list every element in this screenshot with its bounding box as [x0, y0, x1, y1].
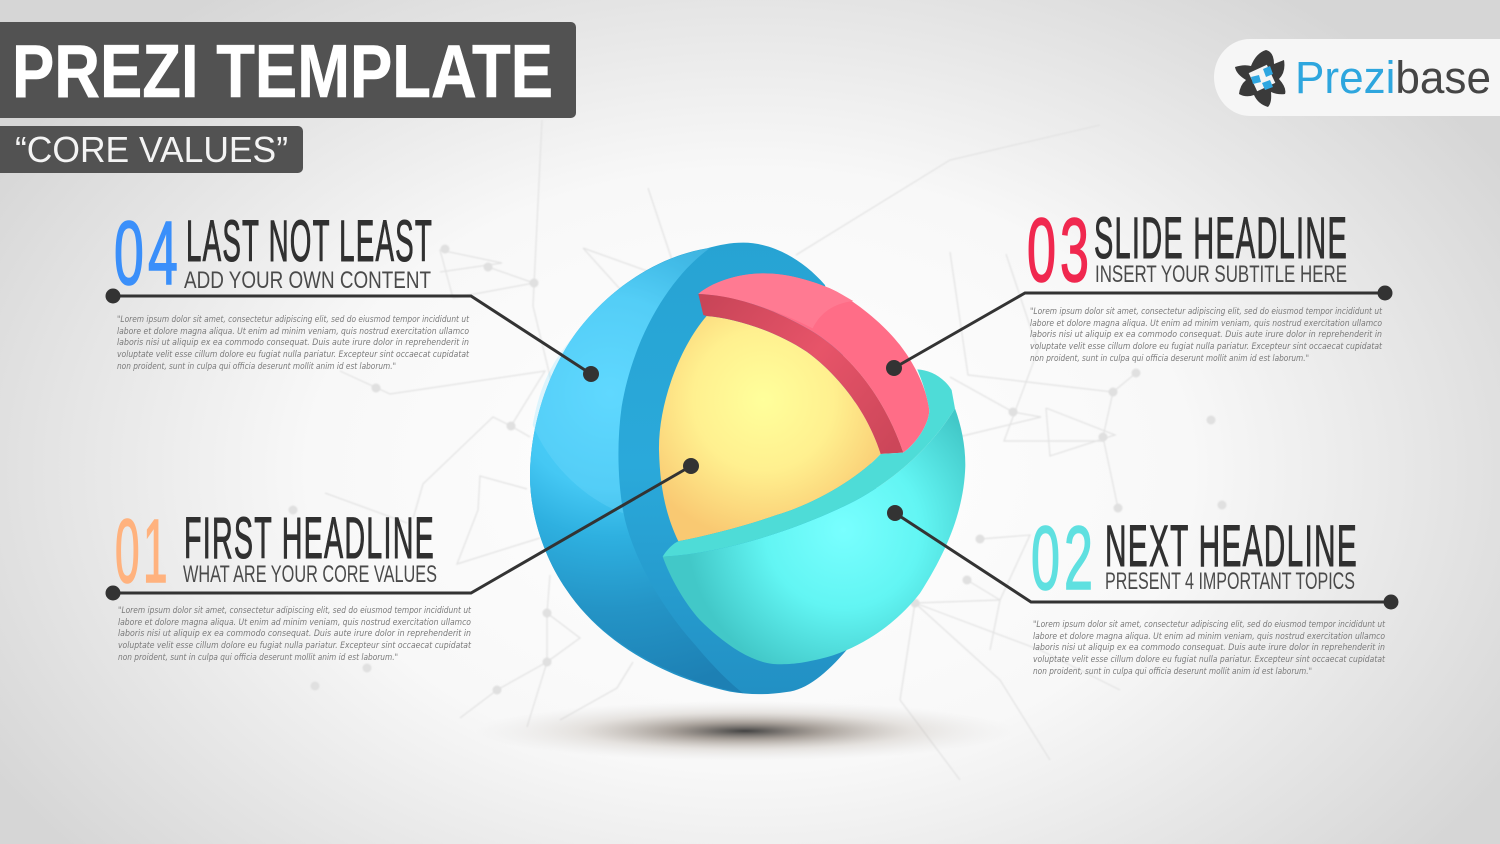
callout 01: First headline: 01	[115, 502, 171, 602]
leader line	[886, 286, 1392, 376]
number 04: 04	[114, 204, 182, 304]
body text	[118, 606, 472, 663]
body text: non proident, sunt in culpa qui officia deserunt mollit anim id est laborum."	[1030, 354, 1309, 364]
icon: Prezibase star	[1235, 50, 1285, 107]
subheading: ADD YOUR OWN CONTENT	[184, 267, 431, 294]
red outer face	[698, 273, 929, 453]
body text	[1033, 620, 1386, 677]
body text: non proident, sunt in culpa qui officia deserunt mollit anim id est laborum."	[1033, 667, 1312, 677]
subheading: WHAT ARE YOUR CORE VALUES	[183, 561, 437, 588]
body text: labore et dolore magna aliqua. Ut enim ad minim veniam, quis nostrud exercitation ullamco	[1033, 632, 1385, 642]
cyan outer face	[663, 408, 965, 664]
callout 02: Next headline	[887, 505, 1398, 677]
body text	[117, 315, 470, 372]
red top highlight	[698, 273, 853, 328]
callout 03: Slide headline	[886, 201, 1392, 376]
subtitle banner: “CORE VALUES”	[15, 129, 288, 170]
shell outer face	[530, 248, 743, 693]
body text: voluptate velit esse cillum dolore eu fugiat nulla pariatur. Excepteur sint occaecat cupidatat	[117, 350, 470, 360]
number 02: 02	[1031, 509, 1097, 609]
network pattern background	[325, 120, 1136, 780]
body text: voluptate velit esse cillum dolore eu fugiat nulla pariatur. Excepteur sint occaecat cupidatat	[118, 641, 472, 651]
leader line	[106, 458, 699, 600]
number 03: 03	[1027, 201, 1093, 301]
body text: "Lorem ipsum dolor sit amet, consectetur adipiscing elit, sed do eiusmod tempor incididunt ut	[1030, 307, 1383, 317]
outer blue shell	[530, 243, 877, 694]
leader line	[887, 505, 1398, 610]
body text	[1030, 307, 1383, 364]
subheading: INSERT YOUR SUBTITLE HERE	[1095, 261, 1347, 288]
cyan inner face	[663, 369, 955, 557]
leader line	[106, 288, 599, 382]
body text: labore et dolore magna aliqua. Ut enim ad minim veniam, quis nostrud exercitation ullamco	[118, 618, 471, 628]
sphere floor shadow	[475, 701, 1015, 761]
body text: laboris nisi ut aliquip ex ea commodo consequat. Duis aute irure dolor in reprehenderit in	[1033, 643, 1385, 653]
callout 01: First headline	[106, 458, 699, 663]
callout 04: Last not least: LAST NOT LEAST	[186, 209, 433, 274]
body text: laboris nisi ut aliquip ex ea commodo consequat. Duis aute irure dolor in reprehenderit in	[118, 629, 471, 639]
callout 01: First headline: FIRST HEADLINE	[184, 506, 435, 571]
body text: voluptate velit esse cillum dolore eu fugiat nulla pariatur. Excepteur sint occaecat cupidatat	[1033, 655, 1386, 665]
yellow core	[659, 316, 881, 541]
body text: non proident, sunt in culpa qui officia deserunt mollit anim id est laborum."	[117, 362, 396, 372]
logo: Prezibase	[1214, 39, 1500, 116]
body text: "Lorem ipsum dolor sit amet, consectetur adipiscing elit, sed do eiusmod tempor incididunt ut	[117, 315, 470, 325]
red layer	[698, 273, 929, 454]
body text: voluptate velit esse cillum dolore eu fugiat nulla pariatur. Excepteur sint occaecat cupidatat	[1030, 342, 1383, 352]
body text: labore et dolore magna aliqua. Ut enim ad minim veniam, quis nostrud exercitation ullamco	[117, 327, 469, 337]
title banner: PREZI TEMPLATE	[12, 29, 553, 113]
network nodes	[288, 244, 1226, 694]
logo: Prezibase: Prezibase	[1295, 52, 1491, 103]
body text: "Lorem ipsum dolor sit amet, consectetur adipiscing elit, sed do eiusmod tempor incididunt ut	[1033, 620, 1386, 630]
body text: "Lorem ipsum dolor sit amet, consectetur adipiscing elit, sed do eiusmod tempor incididunt ut	[118, 606, 472, 616]
callout 04: Last not least	[106, 204, 599, 382]
3D core sphere	[530, 243, 965, 694]
cyan layer	[663, 369, 965, 664]
body text: non proident, sunt in culpa qui officia deserunt mollit anim id est laborum."	[118, 653, 398, 663]
subheading: PRESENT 4 IMPORTANT TOPICS	[1105, 568, 1355, 595]
shell gloss	[533, 248, 710, 513]
body text: laboris nisi ut aliquip ex ea commodo consequat. Duis aute irure dolor in reprehenderit in	[1030, 330, 1382, 340]
body text: laboris nisi ut aliquip ex ea commodo consequat. Duis aute irure dolor in reprehenderit in	[117, 338, 469, 348]
body text: labore et dolore magna aliqua. Ut enim ad minim veniam, quis nostrud exercitation ullamco	[1030, 319, 1382, 329]
red inner face	[698, 294, 903, 454]
